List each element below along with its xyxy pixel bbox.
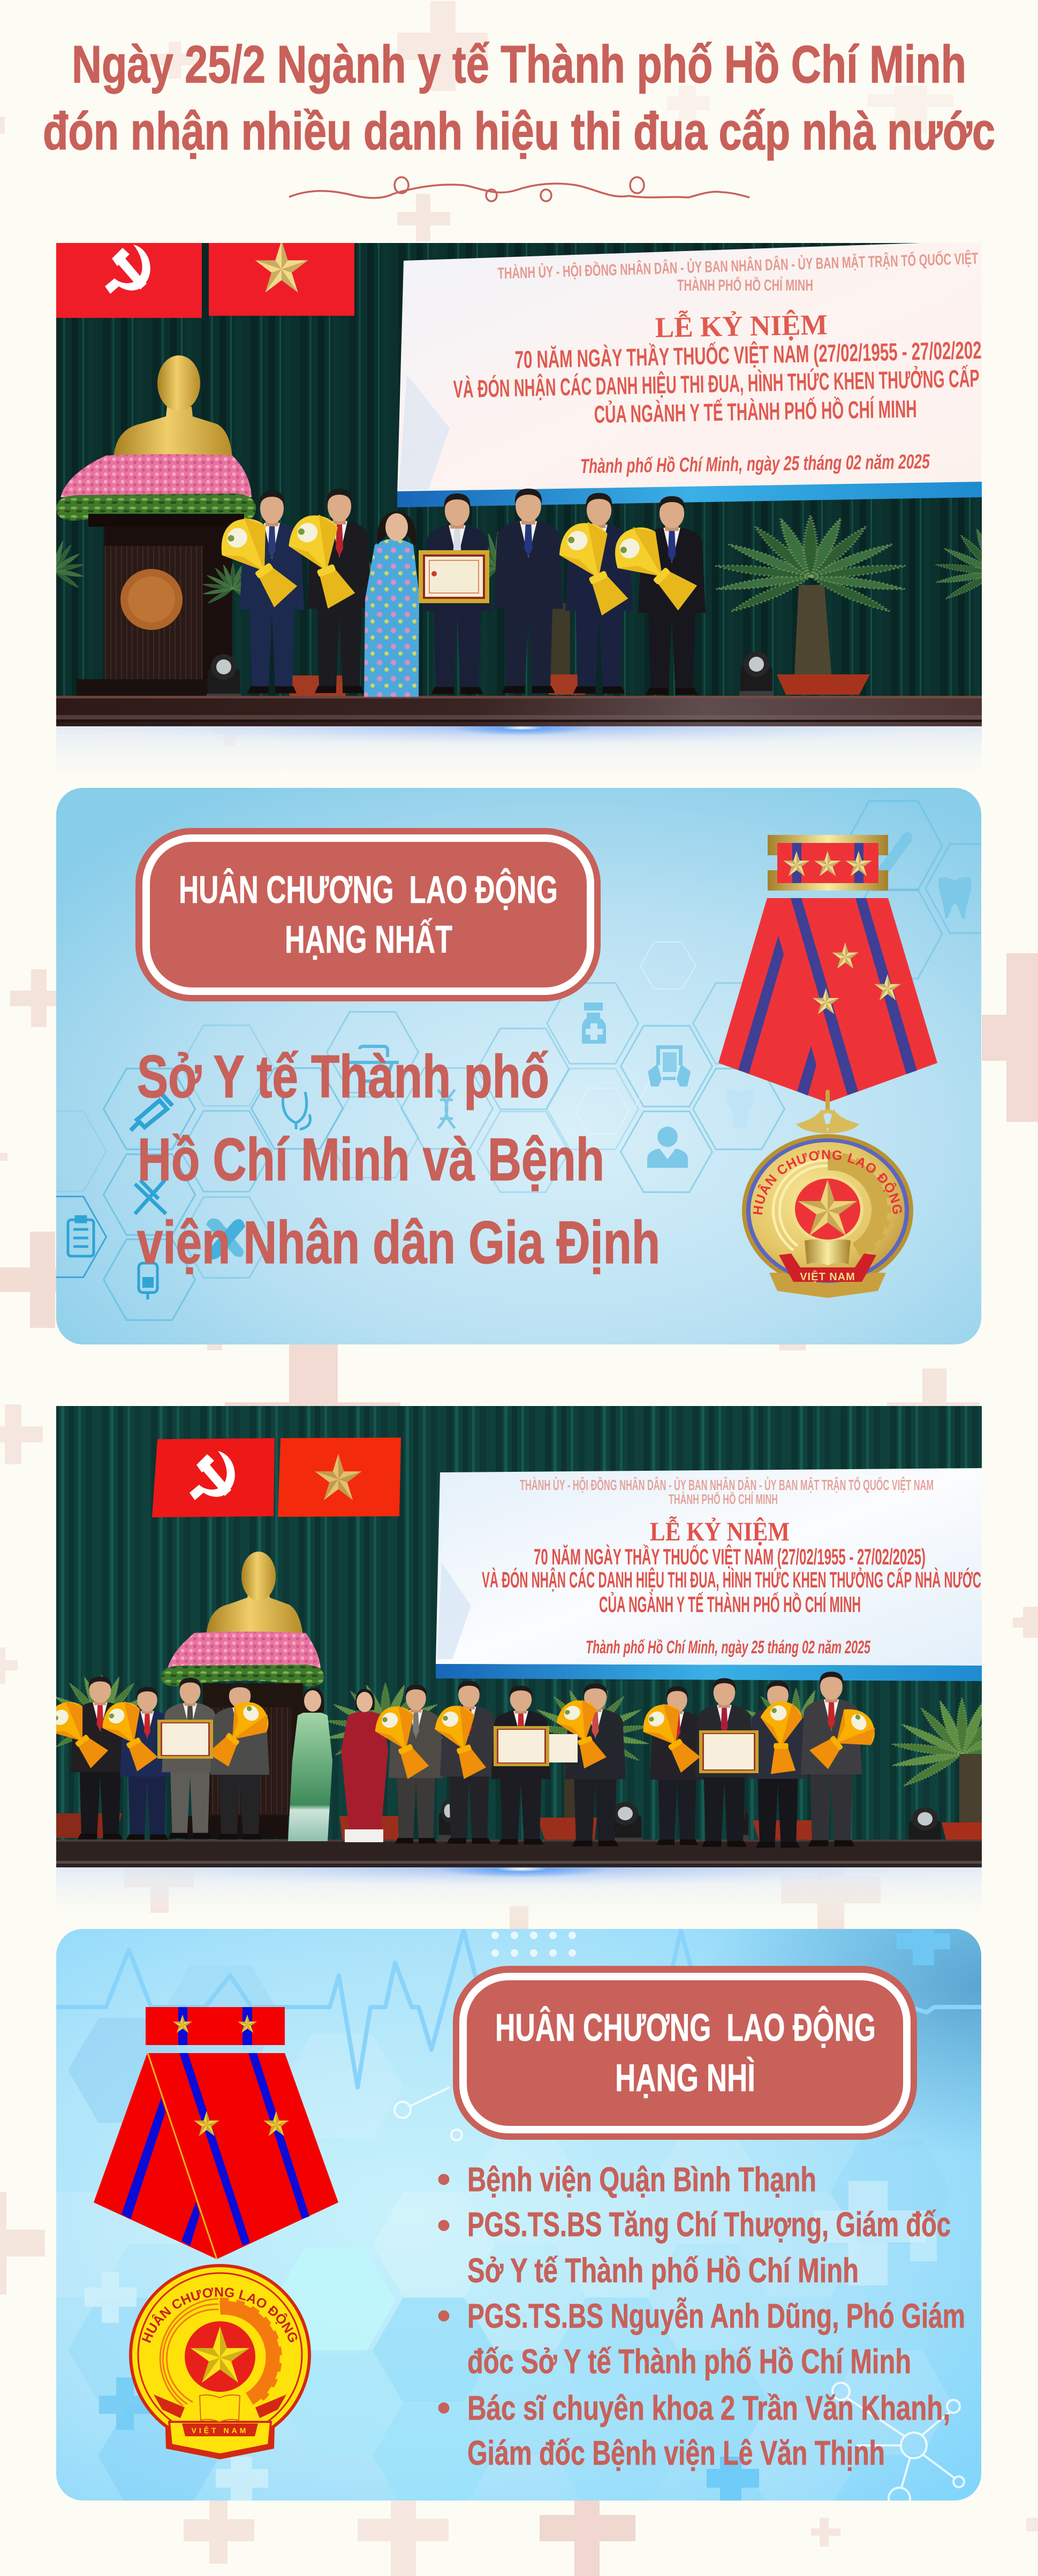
medal body: HUÂN CHƯƠNG LAO ĐỘNG	[141, 2288, 298, 2343]
hexagon medical pattern	[15, 801, 1023, 1320]
icon: bandage	[206, 1218, 245, 1259]
label badge: second class: HẠNG NHÌ	[615, 2057, 755, 2100]
translucent crosses	[85, 1929, 950, 2501]
curtain backdrop	[56, 243, 982, 703]
recipients text: Hồ Chí Minh và Bệnh	[138, 1126, 604, 1193]
projected screen	[397, 243, 982, 507]
icon set: medical symbols	[68, 832, 972, 1300]
certificate frames	[157, 1720, 759, 1773]
recipients list: Bệnh viện Quận Bình Thạnh	[467, 2160, 816, 2199]
gear	[828, 1162, 880, 1250]
medal: second class	[94, 2007, 338, 2459]
banner and tails	[154, 2395, 185, 2418]
woman in red ao dai	[341, 1689, 388, 1842]
plants, pots and spotlights	[46, 1675, 1033, 1849]
book	[200, 2395, 240, 2422]
medal body	[742, 1134, 913, 1298]
medal: first class	[718, 835, 937, 1298]
stage floor	[56, 696, 982, 726]
recipients list: Sở Y tế Thành phố Hồ Chí Minh	[467, 2251, 859, 2290]
icon: doctor	[647, 1127, 688, 1168]
stage floor	[56, 1840, 982, 1867]
icon: first aid kit	[348, 1046, 399, 1081]
projected screen: LỄ KỶ NIỆM	[655, 307, 828, 344]
ribbon	[718, 898, 937, 1103]
icon: medicine bottle	[582, 1002, 606, 1044]
woman in blue ao dai	[364, 511, 419, 697]
ribbon bar with two stars	[146, 2007, 285, 2045]
projected screen: Thành phố Hồ Chí Minh, ngày 25 tháng 02 năm 2025	[586, 1637, 871, 1658]
medal body	[129, 2264, 311, 2459]
bust on podium	[161, 1552, 324, 1839]
network nodes	[395, 2087, 964, 2509]
label badge: second class: HUÂN CHƯƠNG LAO ĐỘNG	[495, 2006, 876, 2049]
icon: tablet with hands	[648, 1045, 691, 1086]
ECG heartbeat line	[56, 1930, 981, 2087]
gear	[220, 2308, 273, 2399]
wing ornament and loop	[796, 1090, 859, 1134]
glow below photo 2	[56, 1848, 982, 1929]
recipients text: Sở Y tế Thành phố	[137, 1043, 549, 1110]
ribbon	[94, 2053, 338, 2259]
icon: dental implant	[726, 1090, 754, 1128]
seven dignitaries with bouquets and certificate	[210, 489, 706, 697]
panel: first-class labor order	[56, 788, 981, 1344]
photo 1: ceremony on stage	[23, 240, 1038, 726]
label badge: first class: HUÂN CHƯƠNG LAO ĐỘNG	[179, 868, 558, 911]
hexagon background and accents	[6, 1929, 981, 2509]
projected screen: THÀNH PHỐ HỒ CHÍ MINH	[669, 1491, 778, 1507]
icon: tooth	[938, 877, 972, 919]
icon: clipboard	[68, 1217, 94, 1256]
medal body: VIỆT NAM	[192, 2426, 248, 2435]
molecular network lines	[575, 942, 696, 1134]
icon: stethoscope	[283, 1092, 310, 1129]
recipients list: đốc Sở Y tế Thành phố Hồ Chí Minh	[467, 2342, 911, 2381]
recipients text: viện Nhân dân Gia Định	[137, 1209, 660, 1276]
icon: syringe	[131, 1094, 172, 1130]
label badge: second class	[453, 1966, 917, 2140]
title	[43, 35, 995, 161]
icon: IV bag	[139, 1263, 157, 1300]
recipients list: Giám đốc Bệnh viện Lê Văn Thịnh	[467, 2434, 885, 2472]
dot grid	[491, 1932, 576, 1957]
book	[805, 1240, 851, 1265]
icon: thermometer	[875, 832, 912, 879]
wheat arcs	[773, 1160, 828, 1250]
decorative ornament under title	[289, 177, 749, 201]
banner	[779, 1253, 876, 1282]
party and national flags	[56, 240, 354, 318]
projected screen: THÀNH PHỐ HỒ CHÍ MINH	[677, 276, 813, 294]
medal body: HUÂN CHƯƠNG LAO ĐỘNG	[753, 1150, 902, 1215]
projected screen: LỄ KỶ NIỆM	[650, 1515, 790, 1546]
woman in green ao dai	[288, 1688, 332, 1841]
panel: second-class labor order	[56, 1929, 981, 2501]
label badge: first class	[135, 828, 601, 1001]
flags	[152, 1438, 401, 1517]
recipients text	[137, 1043, 660, 1276]
medal body: VIỆT NAM	[800, 1270, 855, 1283]
wheat arcs	[160, 2299, 218, 2406]
label badge: first class: HẠNG NHẤT	[285, 918, 452, 961]
recipients list	[438, 2160, 965, 2472]
curtain backdrop	[56, 1406, 982, 1845]
certificate frame	[419, 550, 489, 603]
icon: crutches	[135, 1180, 166, 1214]
photo 2: group ceremony	[40, 1406, 1033, 1867]
bust on podium	[56, 355, 256, 696]
glow below photo 1	[56, 707, 982, 788]
award recipients	[40, 1671, 883, 1848]
medal arc text	[762, 1159, 893, 1216]
ribbon bar with three stars	[768, 835, 888, 891]
projected screen	[436, 1468, 982, 1681]
plants, pots and spotlights	[23, 515, 1038, 700]
icon: DNA strand	[438, 1090, 455, 1128]
bouquets	[40, 1693, 883, 1783]
medal arc text	[147, 2297, 293, 2362]
